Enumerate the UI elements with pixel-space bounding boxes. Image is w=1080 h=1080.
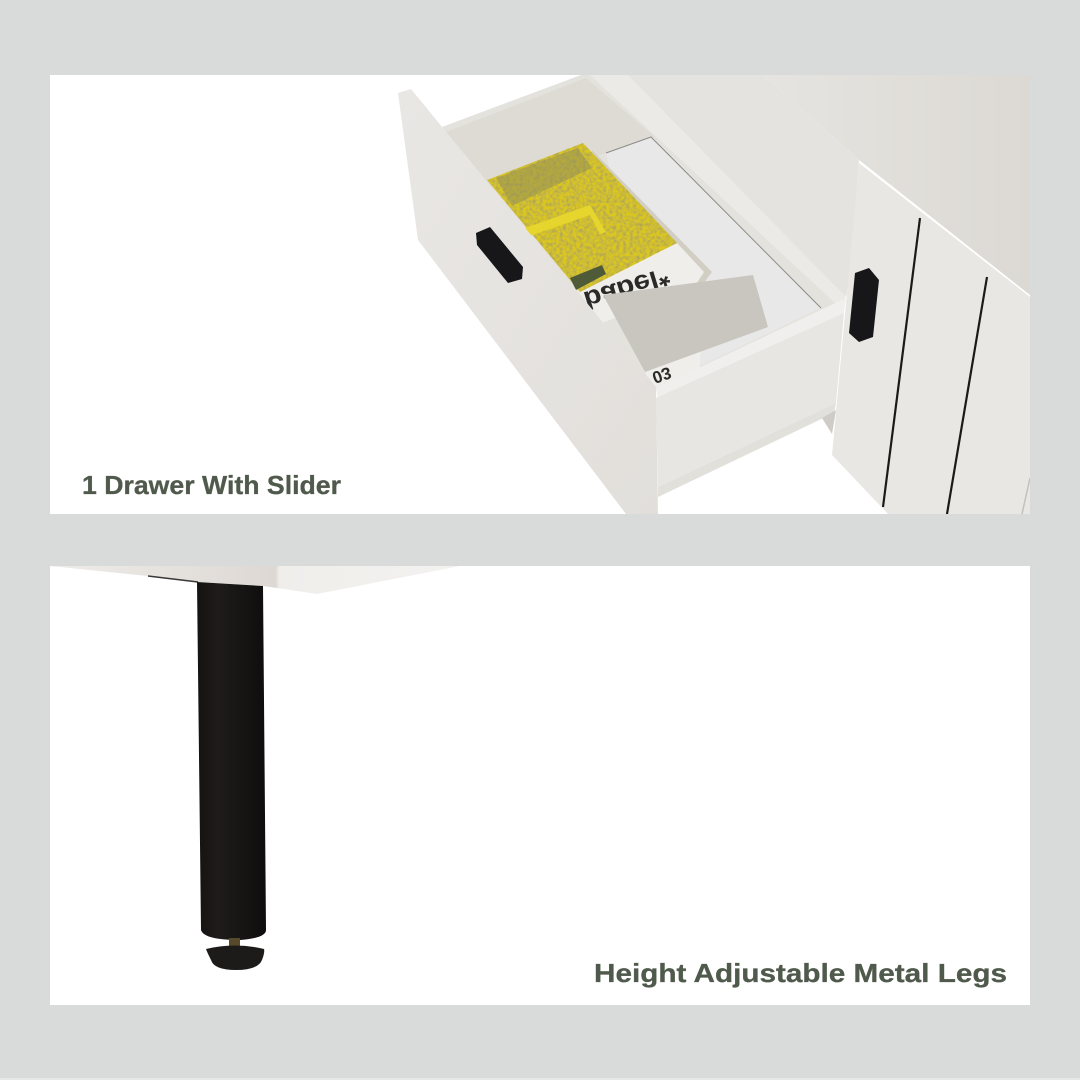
panel: drawer with slider <box>50 75 1030 514</box>
magazine title: babel* <box>580 261 674 316</box>
drawer side panel <box>656 298 846 487</box>
panel: metal legs <box>50 566 1030 1005</box>
cabinet body <box>626 75 1030 297</box>
label: drawer: 1 Drawer With Slider <box>82 470 341 500</box>
book: magazine <box>487 143 712 392</box>
adjustable screw <box>229 938 240 946</box>
cabinet door <box>832 163 1030 514</box>
grey paper <box>603 275 768 372</box>
leg foot <box>206 946 264 970</box>
issue number: 03 <box>650 363 674 387</box>
door handle <box>849 268 879 342</box>
drawer interior <box>442 75 846 390</box>
bottom edge strip <box>0 1078 1080 1080</box>
drawer front <box>398 89 658 514</box>
slider <box>658 403 836 497</box>
label: legs: Height Adjustable Metal Legs <box>594 958 1007 988</box>
metal leg <box>197 582 266 940</box>
table underside <box>50 566 460 594</box>
drawer handle <box>476 227 523 283</box>
